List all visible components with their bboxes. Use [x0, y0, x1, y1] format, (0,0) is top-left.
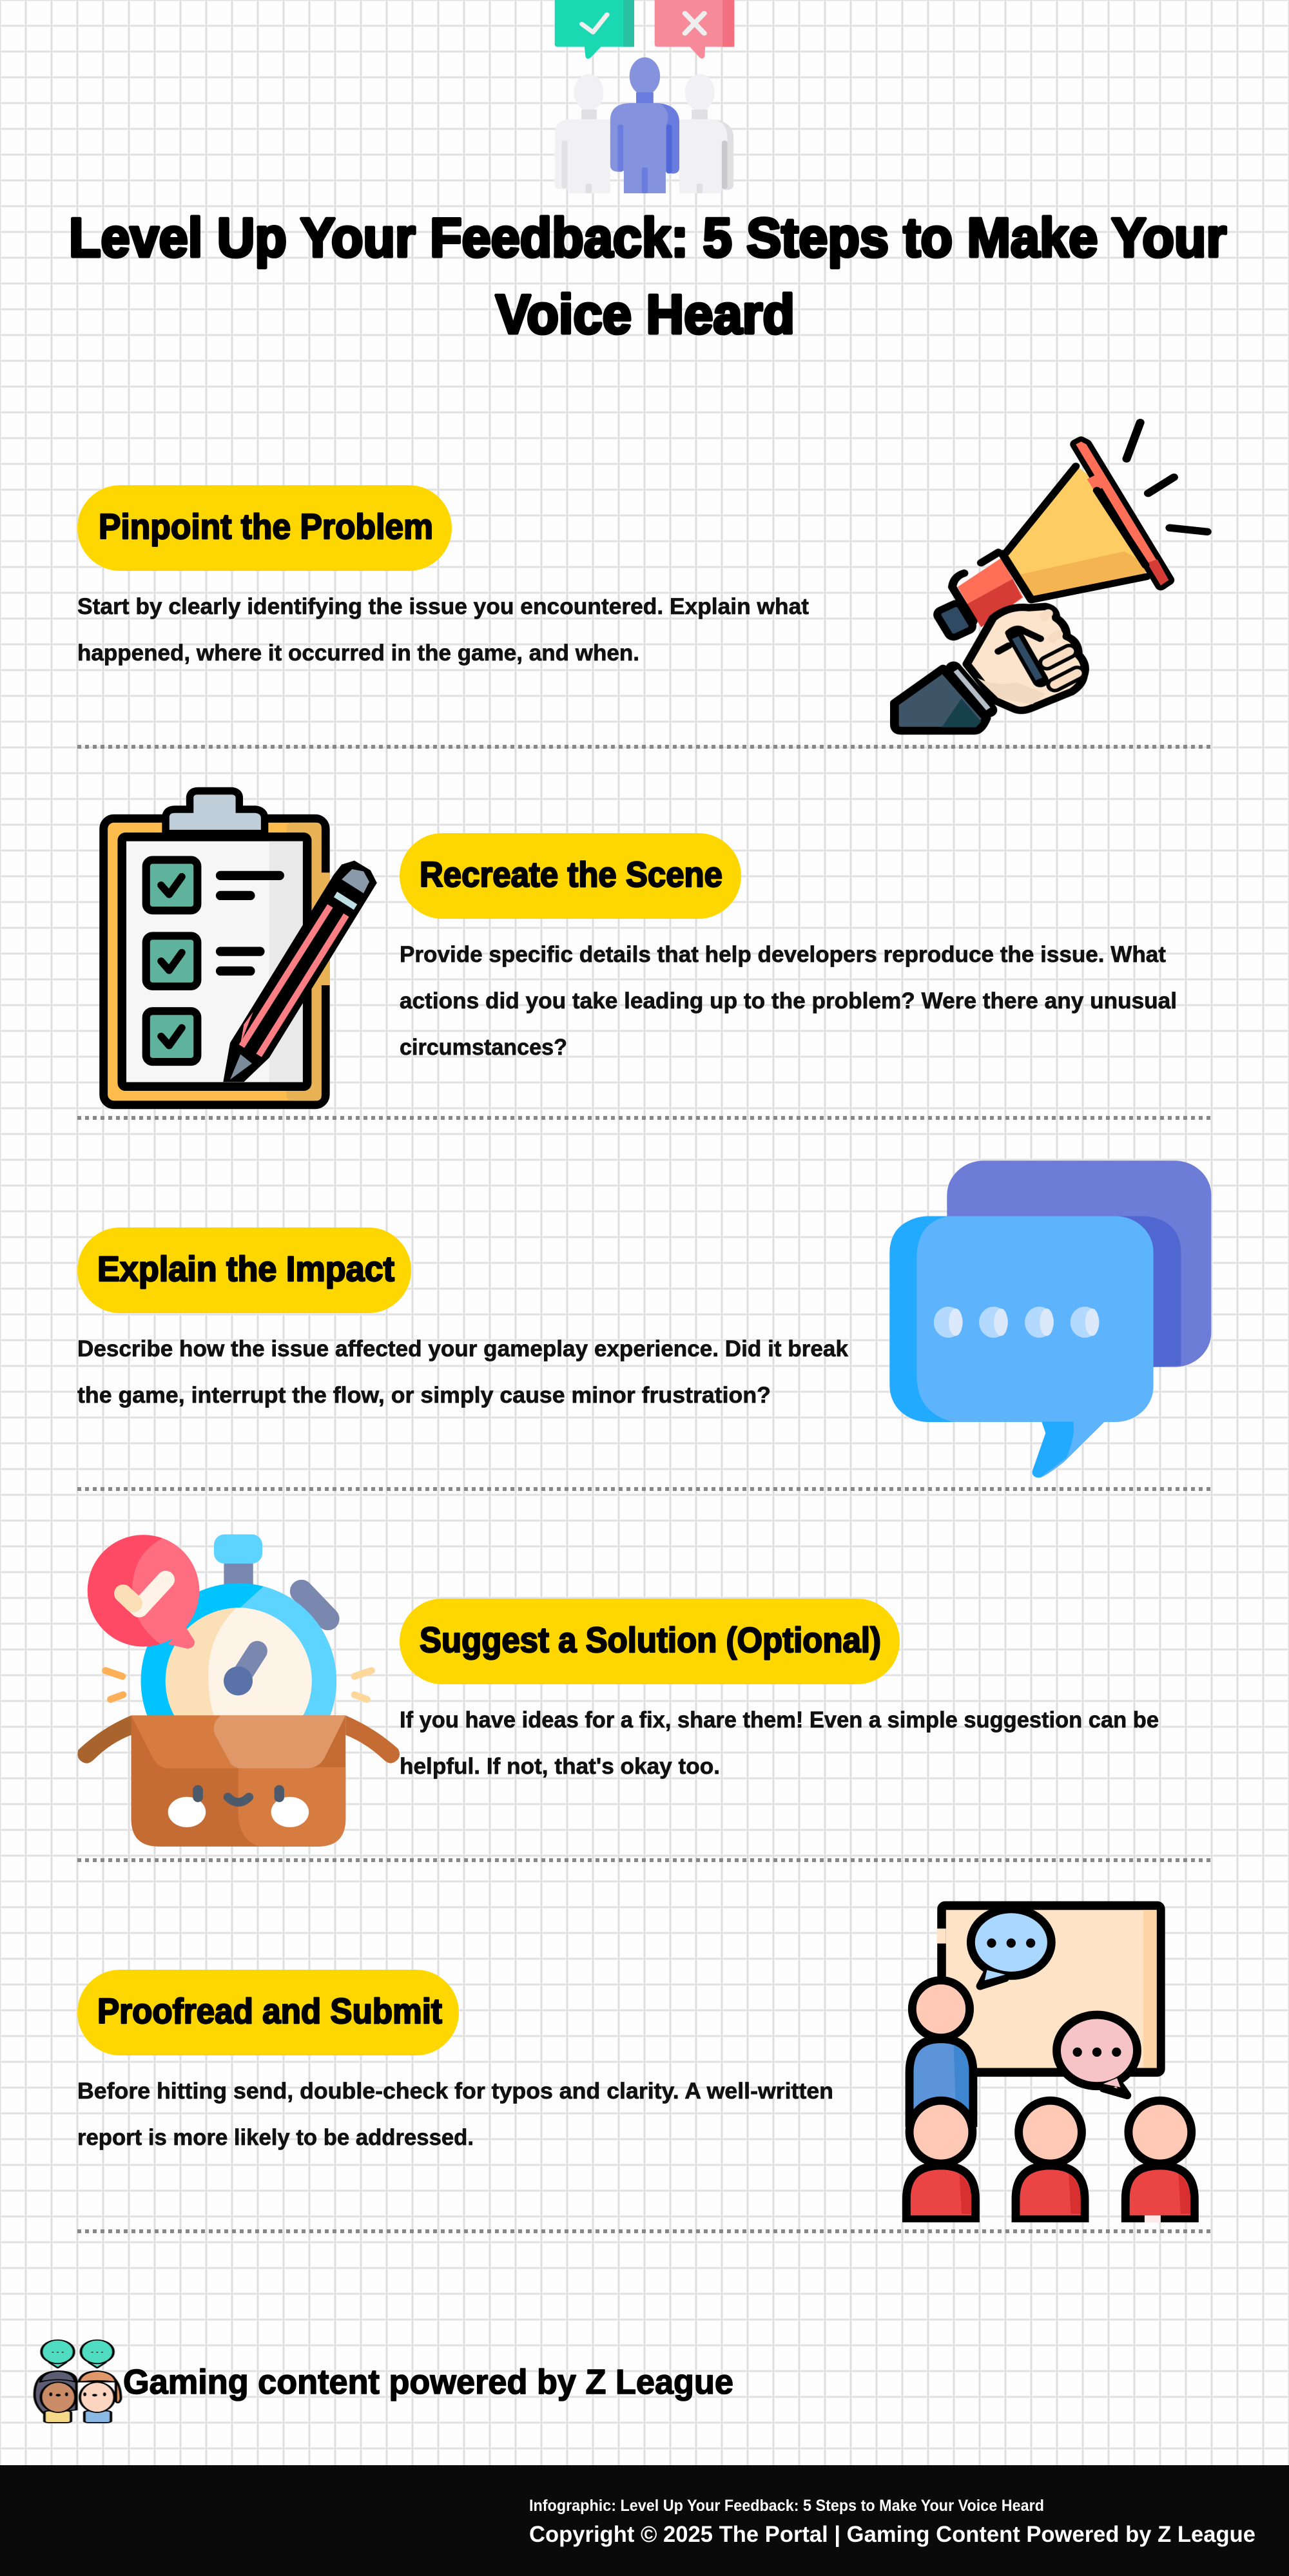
icon: megaphone in hand	[895, 423, 1207, 731]
text block: step 5 description: report is more likely to be addressed.	[77, 2125, 474, 2150]
icon: presenter and audience	[906, 1905, 1194, 2224]
title	[69, 207, 1226, 345]
panel: step 4 suggest a solution	[77, 1534, 1159, 1847]
title: Level Up Your Feedback: 5 Steps to Make Your	[69, 207, 1226, 269]
divider 1	[77, 745, 1212, 749]
heading pill: Recreate the Scene: Recreate the Scene	[420, 854, 722, 894]
icon: right grey person	[679, 74, 733, 193]
divider 2	[77, 1116, 1212, 1120]
icon: blue centre person	[610, 57, 679, 193]
text block: step 3 description: the game, interrupt the flow, or simply cause minor frustration?	[77, 1383, 771, 1408]
panel: step 1 pinpoint the problem	[77, 423, 1207, 731]
icon: left grey person	[555, 74, 610, 193]
heading pill: Explain the Impact: Explain the Impact	[97, 1249, 394, 1289]
text block: step 3 description	[77, 1336, 849, 1408]
text block: step 2 description	[400, 942, 1177, 1060]
panel: step 2 recreate the scene	[104, 791, 1177, 1105]
footer text: copyright: Copyright © 2025 The Portal | Gaming Content Powered by Z League	[529, 2522, 1255, 2547]
icon: stopwatch in a box	[77, 1534, 400, 1847]
text block: step 2 description: Provide specific details that help developers reproduce the issue. What	[400, 942, 1166, 967]
heading pill: Pinpoint the Problem: Pinpoint the Problem	[99, 506, 433, 546]
panel: step 3 explain the impact	[77, 1160, 1211, 1477]
icon: chat bubbles	[889, 1160, 1211, 1477]
title: Voice Heard	[496, 284, 795, 345]
text block: step 1 description: Start by clearly identifying the issue you encountered. Explain what	[77, 594, 809, 619]
text block: step 5 description: Before hitting send, double-check for typos and clarity. A well-written	[77, 2079, 833, 2104]
text block: step 5 description	[77, 2079, 833, 2150]
heading pill: Suggest a Solution (Optional): Suggest a Solution (Optional)	[420, 1620, 881, 1660]
icon: clipboard checklist with pencil	[104, 791, 377, 1105]
footer text: infographic credit: Infographic: Level Up Your Feedback: 5 Steps to Make Your Voice Heard	[529, 2497, 1044, 2515]
icon: people with feedback bubbles	[555, 0, 734, 193]
text block: step 1 description: happened, where it occurred in the game, and when.	[77, 640, 639, 666]
text block: step 4 description	[400, 1707, 1159, 1779]
panel: step 5 proofread and submit	[77, 1905, 1194, 2224]
text block: step 3 description: Describe how the issue affected your gameplay experience. Did it break	[77, 1336, 849, 1361]
text block: step 4 description: If you have ideas for a fix, share them! Even a simple suggestion can be	[400, 1707, 1159, 1733]
heading pill: Proofread and Submit: Proofread and Submit	[97, 1991, 442, 2031]
icon: green check bubble	[555, 0, 634, 59]
text block: step 2 description: actions did you take leading up to the problem? Were there any unusual	[400, 988, 1177, 1014]
divider 4	[77, 1858, 1212, 1862]
text block: step 4 description: helpful. If not, that's okay too.	[400, 1754, 720, 1779]
text: gaming content powered by Z League: Gaming content powered by Z League	[123, 2363, 733, 2401]
heading pill: Pinpoint the Problem	[77, 485, 452, 571]
heading pill: Suggest a Solution (Optional)	[400, 1599, 900, 1684]
text block: step 1 description	[77, 594, 809, 666]
divider 5	[77, 2229, 1212, 2233]
heading pill: Recreate the Scene	[400, 833, 741, 919]
divider 3	[77, 1487, 1212, 1491]
footer bar	[0, 2465, 1289, 2576]
text block: step 2 description: circumstances?	[400, 1035, 567, 1060]
heading pill: Proofread and Submit	[77, 1970, 459, 2055]
heading pill: Explain the Impact	[77, 1227, 411, 1313]
icon: red cross bubble	[655, 0, 734, 59]
icon: two avatars with speech bubbles	[35, 2340, 121, 2423]
